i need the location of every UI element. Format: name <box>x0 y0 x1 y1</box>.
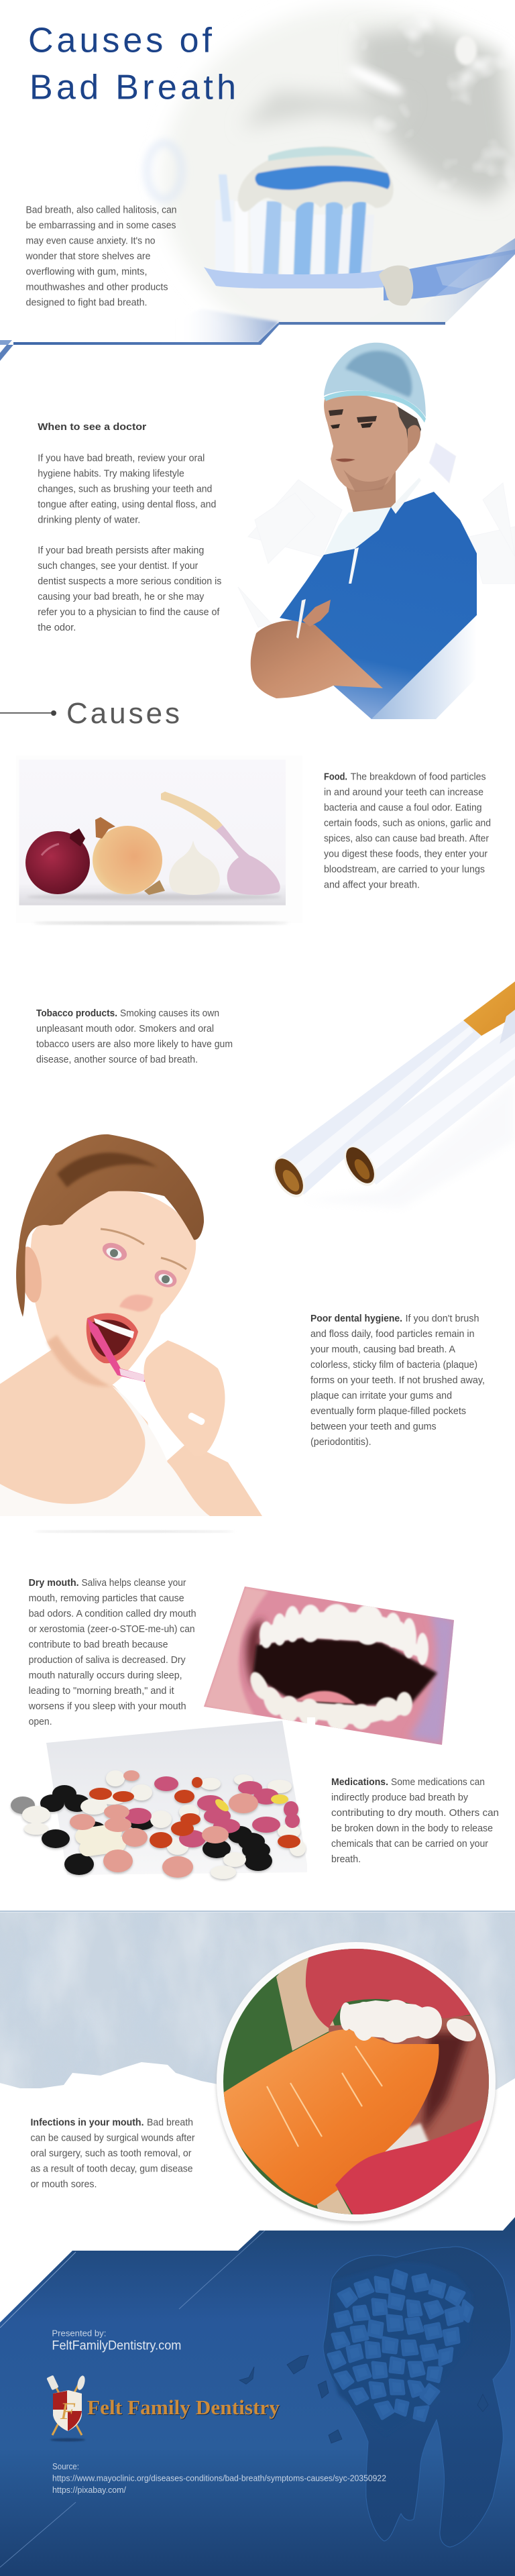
logo <box>46 2375 280 2442</box>
section heading: Causes <box>0 697 180 730</box>
cigarette 1 <box>266 981 515 1203</box>
mask <box>296 478 421 639</box>
dry mouth text block <box>28 1578 196 1727</box>
doctor text block: causing your bad breath, he or she may <box>38 592 205 602</box>
tongue <box>296 1691 355 1704</box>
food text block: bloodstream, are carried to your lungs <box>324 864 485 875</box>
hero blue bar <box>0 322 445 361</box>
poor dental hygiene text block: (periodontitis). <box>310 1437 371 1448</box>
infections text block: oral surgery, such as tooth removal, or <box>31 2148 192 2159</box>
toothbrush bristles <box>215 174 374 277</box>
doctor text block <box>38 421 221 633</box>
sources: Source: <box>52 2462 79 2471</box>
neck and face <box>324 394 421 520</box>
food text block: and affect your breath. <box>324 879 420 890</box>
infections text block: can be caused by surgical wounds after <box>31 2133 195 2144</box>
black pills <box>40 1785 272 1875</box>
infections text block <box>31 2117 195 2190</box>
capsules <box>74 1823 127 1858</box>
doctor text block: refer you to a physician to find the cause of <box>38 607 220 618</box>
food text block: The breakdown of food particles <box>351 771 486 782</box>
dry mouth text block: mouth, removing particles that cause <box>29 1593 184 1604</box>
pills photo <box>11 1717 315 1885</box>
dry mouth text block: or xerostomia (zeer-o-STOE-me-uh) can <box>29 1624 195 1635</box>
nose <box>119 1295 153 1311</box>
carrot bite photo circle <box>215 1942 510 2227</box>
intro text block: designed to fight bad breath. <box>25 298 148 309</box>
dry mouth text block: production of saliva is decreased. Dry <box>29 1655 186 1666</box>
presented by: Presented by: <box>52 2328 106 2339</box>
hand <box>144 1340 225 1456</box>
yellow pills <box>213 1794 288 1813</box>
medications text block: be broken down in the body to release <box>331 1823 493 1834</box>
icon: shattered tooth <box>239 2247 511 2547</box>
poor dental hygiene text block: If you don't brush <box>405 1313 479 1324</box>
dry mouth text block: Saliva helps cleanse your <box>82 1578 186 1589</box>
medications text block: indirectly produce bad breath by <box>331 1792 469 1803</box>
red pills <box>89 1777 300 1848</box>
white pills <box>22 1770 306 1879</box>
dry mouth text block: contribute to bad breath because <box>29 1640 168 1650</box>
surgical cap <box>324 343 426 423</box>
ear <box>17 1245 45 1304</box>
dry mouth text block: open. <box>29 1717 52 1727</box>
finger <box>276 1957 335 2051</box>
salmon pills <box>70 1770 258 1878</box>
tobacco text block: Tobacco products. <box>36 1008 117 1019</box>
background shards behind doctor <box>238 443 515 627</box>
title: Causes of <box>28 21 213 60</box>
poor dental hygiene text block: forms on your teeth. If not brushed away, <box>310 1375 485 1386</box>
sources: https://www.mayoclinic.org/diseases-conditions/bad-breath/symptoms-causes/syc-20350922 <box>52 2474 386 2483</box>
lower teeth <box>247 1669 412 1730</box>
doctor figure <box>251 343 477 719</box>
pink pills <box>125 1776 300 1847</box>
poor dental hygiene text block: and floss daily, food particles remain in <box>310 1329 475 1340</box>
intro text block <box>25 205 176 309</box>
cigarette 2 <box>337 1010 515 1191</box>
lower lip <box>335 2118 484 2214</box>
icon: white garlic <box>169 841 220 895</box>
poor dental hygiene text block <box>310 1313 485 1448</box>
title <box>28 21 236 107</box>
doctor text block: such changes, see your dentist. If your <box>38 561 198 572</box>
footer panel <box>0 2214 515 2576</box>
open mouth photo <box>201 1583 456 1748</box>
logo: F <box>60 2398 76 2424</box>
sources <box>52 2462 386 2495</box>
medications text block: contributing to dry mouth. Others can <box>331 1808 499 1819</box>
dry mouth text block: Dry mouth. <box>29 1578 79 1589</box>
infections text block: Infections in your mouth. <box>31 2117 144 2128</box>
food text block: in and around your teeth can increase <box>324 787 483 798</box>
intro text block: mouthwashes and other products <box>25 282 168 292</box>
presented by: FeltFamilyDentistry.com <box>52 2339 181 2353</box>
food photo panel <box>16 755 302 924</box>
doctor text block: If you have bad breath, review your oral <box>38 453 205 464</box>
mouth and toothbrush <box>87 1313 146 1382</box>
eyes <box>100 1229 186 1290</box>
face <box>30 1189 196 1387</box>
poor dental hygiene text block: between your teeth and gums <box>310 1421 437 1432</box>
intro text block: may even cause anxiety. It's no <box>25 236 156 247</box>
toothbrush head and handle <box>204 250 515 306</box>
doctor text block: changes, such as brushing your teeth and <box>38 484 212 495</box>
upper teeth <box>260 1604 428 1665</box>
tobacco text block <box>36 1008 233 1065</box>
doctor text block: the odor. <box>38 623 76 633</box>
medications text block: Medications. <box>331 1777 388 1788</box>
arms <box>251 600 383 698</box>
poor dental hygiene text block: Poor dental hygiene. <box>310 1313 402 1324</box>
tobacco text block: disease, another source of bad breath. <box>36 1055 198 1065</box>
food text block: bacteria and cause a foul odor. Eating <box>324 802 482 813</box>
intro text block: wonder that store shelves are <box>25 251 150 262</box>
tobacco text block: tobacco users are also more likely to have gum <box>36 1039 233 1050</box>
dry mouth text block: bad odors. A condition called dry mouth <box>29 1609 196 1619</box>
woman brushing teeth photo <box>0 1134 262 1516</box>
title: Bad Breath <box>30 68 236 107</box>
dry mouth text block: worsens if you sleep with your mouth <box>28 1701 186 1712</box>
doctor text block: If your bad breath persists after making <box>38 545 204 556</box>
teeth <box>340 2000 480 2046</box>
sources: https://pixabay.com/ <box>52 2485 127 2495</box>
carrot <box>215 2029 439 2206</box>
medications text block: breath. <box>331 1854 361 1865</box>
poor dental hygiene text block: your mouth, causing bad breath. A <box>310 1344 455 1355</box>
cigarettes photo <box>266 981 515 1208</box>
shoulders, neck and arm <box>0 1348 262 1516</box>
food text block: you digest these foods, they enter your <box>324 849 488 859</box>
medications text block: Some medications can <box>391 1777 485 1788</box>
poor dental hygiene text block: colorless, sticky film of bacteria (plaque) <box>310 1360 477 1371</box>
intro text block: be embarrassing and in some cases <box>25 220 176 231</box>
food text block: Food. <box>324 771 347 782</box>
infections text block: as a result of tooth decay, gum disease <box>31 2164 193 2175</box>
food text block <box>324 771 491 890</box>
doctor text block: hygiene habits. Try making lifestyle <box>38 468 184 479</box>
toothpaste <box>238 146 394 212</box>
food text block: spices, also can cause bad breath. After <box>324 833 489 844</box>
icon: red onion <box>25 828 90 894</box>
upper lip <box>306 1949 471 2028</box>
doctor text block: drinking plenty of water. <box>38 515 140 526</box>
hair <box>16 1134 204 1317</box>
dry mouth text block: leading to "morning breath," and it <box>29 1686 174 1697</box>
grey pill <box>11 1796 35 1814</box>
tobacco text block: Smoking causes its own <box>120 1008 219 1019</box>
poor dental hygiene text block: plaque can irritate your gums and <box>310 1391 452 1401</box>
scrubs <box>280 492 477 719</box>
icon: yellow onion <box>93 817 165 895</box>
white top <box>0 1386 210 1516</box>
logo: Felt Family Dentistry <box>87 2396 280 2419</box>
medications text block: chemicals that can be carried on your <box>331 1839 488 1849</box>
infections text block: Bad breath <box>147 2117 193 2128</box>
intro text block: overflowing with gum, mints, <box>25 267 148 278</box>
logo: Felt Family Dentistry <box>88 2396 280 2420</box>
intro text block: Bad breath, also called halitosis, can <box>25 205 177 216</box>
hero panel: toothbrush photo <box>142 8 515 342</box>
divider shadow <box>34 1531 235 1532</box>
doctor text block: When to see a doctor <box>38 421 146 433</box>
infections text block: or mouth sores. <box>31 2179 97 2190</box>
presented by <box>52 2330 181 2352</box>
tobacco text block: unpleasant mouth odor. Smokers and oral <box>36 1024 214 1034</box>
medications text block <box>331 1777 499 1865</box>
section heading: Causes: Causes <box>66 697 180 730</box>
doctor text block: dentist suspects a more serious condition is <box>38 576 221 587</box>
poor dental hygiene text block: eventually form plaque-filled pockets <box>310 1406 466 1417</box>
watercolor band <box>0 1911 515 2094</box>
food text block: certain foods, such as onions, garlic and <box>324 818 491 828</box>
mouth interior and tongue <box>329 2015 489 2141</box>
doctor text block: tongue after eating, using dental floss, and <box>38 499 216 510</box>
dry mouth text block: mouth naturally occurs during sleep, <box>29 1670 182 1681</box>
icon: purple garlic <box>161 792 280 895</box>
